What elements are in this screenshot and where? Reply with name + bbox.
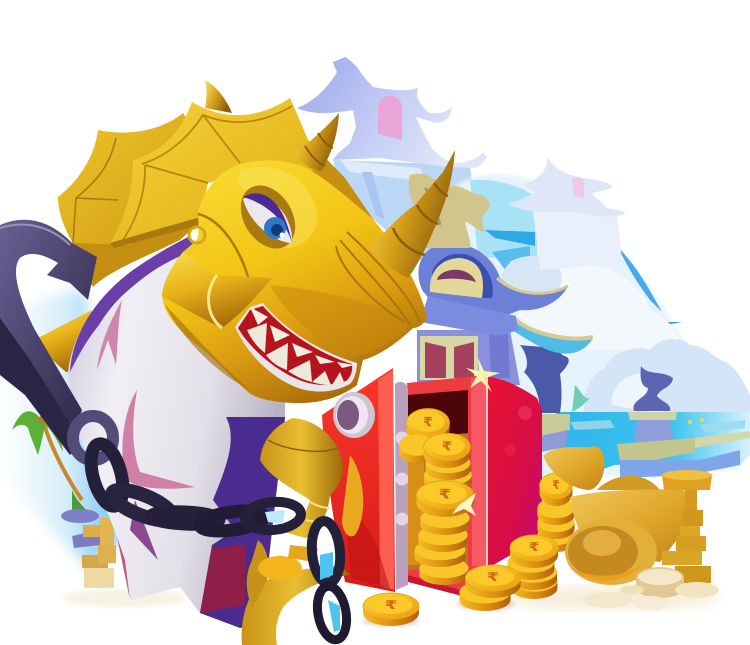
palm tree bbox=[12, 411, 88, 512]
eye bbox=[230, 175, 306, 259]
background sky behind temple bbox=[333, 160, 480, 260]
shark body bbox=[68, 236, 285, 628]
sand ground bbox=[63, 586, 720, 610]
stone dragon statue, far bbox=[617, 366, 750, 460]
left background glow bbox=[0, 290, 120, 570]
gold arm bbox=[260, 418, 343, 538]
coin stack beside safe bbox=[537, 473, 575, 552]
crest top spike bbox=[205, 80, 232, 113]
gold ingots bbox=[543, 446, 692, 585]
large ingot bbox=[597, 476, 660, 490]
hinge bar bbox=[395, 382, 408, 590]
large nose horn bbox=[370, 150, 455, 278]
stone dragon statue, near bbox=[520, 345, 570, 452]
sparkles on safe bbox=[452, 358, 500, 516]
crest front panels bbox=[110, 98, 320, 243]
background clouds and water bbox=[555, 339, 750, 478]
central temple building bbox=[417, 243, 593, 385]
small head horn bbox=[296, 113, 339, 171]
safe dial bbox=[333, 392, 375, 438]
small cash coins bbox=[582, 567, 719, 610]
gold shark head bbox=[162, 160, 427, 403]
tall coin column right bbox=[662, 470, 712, 583]
background faded pagoda bbox=[508, 158, 625, 270]
crest right dark plate bbox=[280, 98, 375, 222]
anchor bbox=[0, 220, 97, 455]
mouth with teeth bbox=[235, 303, 357, 392]
earring bbox=[189, 227, 205, 243]
safe body bbox=[322, 368, 542, 596]
crest back panel bbox=[58, 113, 207, 245]
back ingot bbox=[543, 446, 604, 490]
crest dark lower plate bbox=[73, 222, 200, 287]
coins inside safe bbox=[399, 409, 474, 585]
background sky-blue scene bbox=[455, 175, 750, 480]
cheek spike armor bbox=[162, 252, 272, 328]
chain gap highlights bbox=[265, 510, 340, 632]
shark shoulder fin bbox=[38, 310, 92, 372]
golden dragon statue bbox=[409, 174, 490, 248]
gold crest fan bbox=[58, 80, 375, 287]
blue pot with coin pile bbox=[61, 509, 116, 588]
front ingot bbox=[565, 519, 657, 585]
coin stacks in front of safe bbox=[458, 535, 558, 611]
single front coin bbox=[363, 593, 419, 626]
gold tail bbox=[242, 540, 350, 645]
iron chain bbox=[73, 416, 350, 642]
safe door bbox=[322, 368, 395, 592]
background temple: upper lavender pagoda bbox=[297, 57, 487, 220]
chain ring bbox=[73, 416, 113, 460]
